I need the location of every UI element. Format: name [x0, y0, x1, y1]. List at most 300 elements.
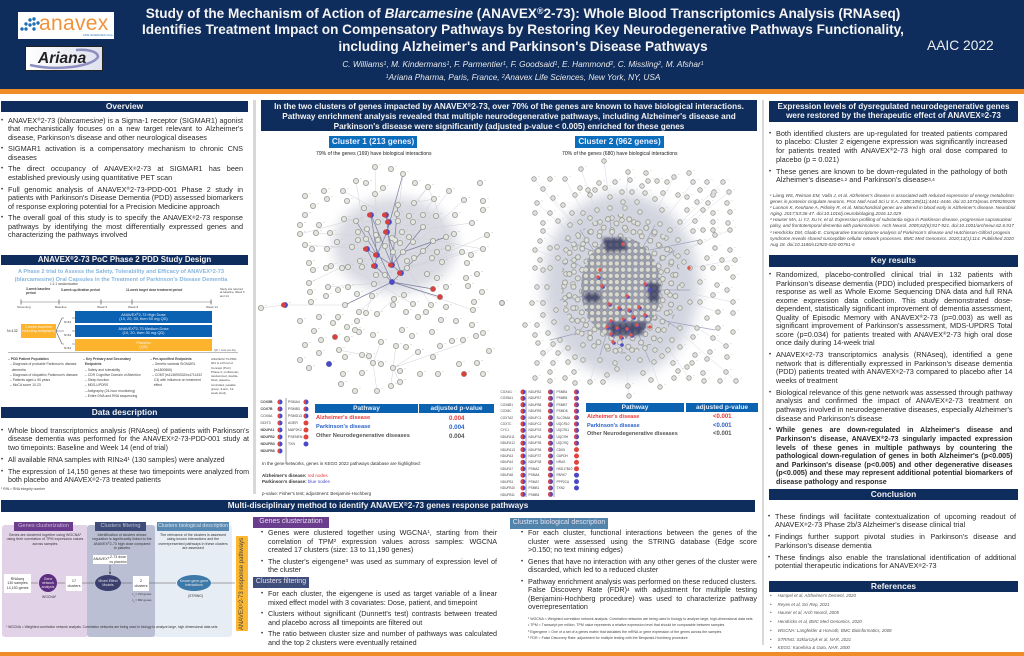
gene names: cluster 2 third column: PPP2CA: [556, 480, 569, 484]
arm: placebo: Placebo: [136, 340, 151, 344]
timeline labels: Screening: [17, 305, 31, 309]
gene names: cluster 1 second column: AGER: [288, 420, 298, 424]
stage text: filtering: Identification of clusters whose regulation is significantly linked to the ANAVEX®2-73 high dose compared to placebo: [92, 533, 152, 550]
endpoint lists: Phase 2, multicenter,: [211, 370, 239, 374]
gene names: cluster 2 third column: UQCR11: [556, 428, 569, 432]
endpoint lists: controlled, parallel-: [211, 383, 236, 387]
node: mixed effect models: [95, 575, 121, 591]
overview text: The direct occupancy of ANAVEX®2-73 at SIGMAR1 has been established previously using quantitative PET scan: [8, 164, 243, 182]
heading: overview: Overview: [106, 101, 143, 111]
gene names: cluster 2 third column: GAPDH: [556, 454, 568, 458]
row: Alzheimer's: Alzheimer's disease: [587, 414, 639, 420]
arm: high dose: [75, 311, 212, 323]
box: 2 clusters: 2: [140, 579, 142, 583]
timeline labels: at baseline, Week 5: [220, 290, 245, 294]
endpoint lists: – Key Primary and Secondary: [83, 357, 131, 361]
box: 17 clusters: 17: [72, 579, 76, 583]
method: filtering text: Clusters without significant (Dunnett's test) contrasts between treated and placebo across all timepoints are filtered out: [268, 609, 497, 627]
node: gene network analysis: Gene network analysis: [42, 577, 54, 589]
expression text: Both identified clusters are up-regulated for treated patients compared to placebo: Cluster 2 eigengene expression was significantly increased for patients treated with ANAVEX®2-73 high oral dose compared to placebo (p = 0.021): [776, 128, 1008, 164]
row: Alzheimer's: Alzheimer's disease: [316, 415, 370, 421]
gene names: cluster 2 third column: PARK7: [556, 473, 567, 477]
gene list: cluster 1: [278, 398, 308, 464]
arm: medium dose: ANAVEX®2-73 Medium Dose: [118, 326, 169, 330]
table header: p-value: adjusted p-value: [430, 405, 483, 412]
expression citations: palsy, and frontotemporal dementia with parkinsonism. Arch Neurol. 2005;62(6):917-921. doi:10.1001/archneur.62.6.917: [770, 223, 1014, 228]
value: Alzheimer's: <0.001: [713, 414, 732, 420]
node: known interactions: interactions: [185, 583, 203, 587]
gene names: cluster 1 second column: PSMB3: [288, 406, 300, 410]
gene names: cluster 2 first column: NDUFA4: [500, 460, 513, 464]
divider: [8, 352, 238, 353]
sample size: N=132: [7, 329, 18, 333]
gene names: cluster 2 first column: COX7C: [500, 422, 511, 426]
stage tag: filtering: Clusters filtering: [100, 523, 141, 529]
gene names: cluster 1 first column: DDIT3: [260, 420, 271, 424]
arm sizes: [64, 320, 71, 350]
right heading: expression levels: Expression levels of dysregulated neurodegenerative genes: [777, 102, 1010, 111]
endpoint lists: group, 3-arm, 14-: [211, 387, 234, 391]
network legend: In the gene networks, genes in KEGG 2022 pathways database are highlighted:: [262, 461, 421, 466]
value: other: 0.004: [449, 432, 464, 440]
title: [142, 6, 904, 54]
table: cluster 1 pathways: [315, 404, 494, 440]
gene names: cluster 2 third column: [556, 390, 572, 490]
right heading: expression levels: [768, 100, 1019, 122]
value: Parkinson's: <0.001: [713, 422, 732, 428]
expression citations: [770, 193, 1016, 247]
value: Parkinson's: 0.004: [449, 424, 464, 431]
endpoint lists: randomized, double-: [211, 374, 238, 378]
flow arrows: [31, 565, 235, 584]
multi-disciplinary heading: [0, 499, 756, 513]
stage tag: biological: Clusters biological description: [158, 523, 228, 529]
references list: • Reyes et al, Sci Rep, 2021: [770, 602, 830, 607]
gene names: cluster 2 second column: NDUFB8: [528, 403, 541, 407]
gene names: cluster 2 first column: COX8C: [500, 409, 511, 413]
gene names: cluster 1 second column: PSMD13: [288, 414, 302, 418]
timeline labels: Week 14: [206, 305, 218, 309]
timeline labels: Study site referred: [220, 287, 243, 291]
gene names: cluster 2 third column: SLC25A6: [556, 416, 570, 420]
table header: p-value: [686, 403, 758, 412]
gene names: cluster 1 first column: COX5B: [260, 400, 273, 404]
references list: [770, 592, 1010, 653]
baseline box: [21, 324, 56, 338]
gene names: cluster 2 first column: COX7A2: [500, 416, 513, 420]
heading: data description: Data description: [92, 407, 157, 417]
arm sizes: N=44: [64, 320, 71, 324]
gene names: cluster 2 second column: NDUFC1: [528, 416, 541, 420]
method: clusterization text: The cluster's eigengene3 was used as summary of expression level of the cluster: [268, 557, 497, 574]
row: Parkinson's: Parkinson's disease: [587, 422, 640, 428]
method: biological text: [521, 528, 757, 611]
value: Alzheimer's: 0.004: [449, 415, 464, 422]
box: RNAseq input: [4, 574, 31, 593]
panel: biological stage: [153, 525, 232, 637]
endpoint lists: – Sleep function: [85, 378, 109, 382]
gene names: cluster 2 first column: NDUFA7: [500, 467, 513, 471]
heading: key results: [768, 254, 1019, 268]
expression text: These genes are known to be down-regulated in the pathology of both Alzheimer's disease1,2 and Parkinson's disease3,4: [776, 166, 1008, 184]
node: mixed effect models: Mixed Effect: [98, 579, 118, 583]
timeline labels: period: [26, 291, 36, 295]
gene names: cluster 1 first column: NDUFB3: [260, 442, 275, 446]
gene names: cluster 2 third column: PSMD8: [556, 409, 567, 413]
conclusion text: [768, 512, 1016, 570]
stage tag: clusterization: Genes clusterization: [18, 523, 69, 529]
gene names: cluster 2 second column: PSMB4: [528, 492, 539, 496]
heading: conclusion: Conclusion: [871, 489, 916, 499]
network: cluster 2: [500, 158, 742, 399]
gene names: cluster 2 first column: NDUFA3: [500, 454, 513, 458]
label: cluster sizes: c 2 = 962 genes: [132, 598, 151, 604]
label: cluster sizes: [132, 592, 152, 604]
timeline labels: Week 5: [97, 305, 107, 309]
references list: • Hauser et al, Arch Neurol, 2005: [770, 610, 839, 615]
gene names: cluster 2 first column: COX6B1: [500, 403, 513, 407]
panel: study design: [1, 255, 248, 398]
box: dose vs placebo: [93, 555, 127, 564]
panel: overview: [1, 101, 248, 239]
references list: • Hampel et al, Alzheimer's Dement, 2020: [770, 593, 856, 598]
title: Study of the Mechanism of Action of Blarcamesine (ANAVEX®2-73): Whole Blood Transcriptomics Analysis (RNAseq): [146, 6, 900, 20]
gene names: cluster 1 first column: COX7B: [260, 406, 273, 410]
box: 17 clusters: clusters: [67, 584, 81, 588]
endpoint lists: – COMT(rs113895332/rs4711432: [152, 373, 202, 377]
gene names: cluster 1 first column: COX6A: [260, 414, 272, 418]
expression citations: 4 Hendrickx DM, Glaab E. Comparative transcriptome analysis of Parkinson's disease and Hutchinson-Gilford progeria: [770, 230, 1010, 235]
trial subtitle: [14, 269, 228, 283]
endpoint lists: Concept (PoC): [211, 366, 231, 370]
heading: overview: [0, 100, 249, 113]
row: other: Other Neurodegenerative diseases: [316, 432, 410, 438]
data text: Whole blood transcriptomics analysis (RNAseq) of patients with Parkinson's disease dementia was performed for the ANAVEX®2-73-PDD-001 study at two timepoints: Baseline and Week 14 (end of trial): [8, 426, 249, 452]
stage tag: clusterization: [14, 522, 73, 531]
table: cluster 2 pathways: [586, 403, 758, 437]
trial subtitle: A Phase 2 trial to Assess the Safety, Tolerability and Efficacy of ANAVEX®2-73: [18, 269, 224, 275]
endpoint lists: C3) with influence on treatment: [154, 378, 201, 382]
stage tag: biological: [157, 522, 229, 531]
endpoint lists: – Diagnosis of idiopathic Parkinson's disease: [10, 373, 78, 377]
endpoint lists: – Actigraphy (24-hour monitoring): [85, 389, 135, 393]
endpoint lists: – Diagnosis of probable Parkinson's disease: [10, 362, 76, 366]
references list: • WGCNA: Langfelder & Horvath, BMC Bioinformatics, 2008: [770, 628, 892, 633]
timeline labels: Week 8: [128, 305, 138, 309]
method: biological text: For each cluster, functional interactions between the genes of the cluster were assessed using the STRING database (Edge score >0.150; no text mining edges): [528, 528, 757, 554]
gene names: cluster 2 second column: NDUFS7: [528, 454, 541, 458]
gene names: cluster 2 second column: PSMA2: [528, 467, 539, 471]
stage text: biological: The relevance of the clusters is assessed using known interactions and the overrepresented pathways in these clusters are assessed: [158, 533, 228, 550]
header band: [0, 0, 1024, 94]
endpoint lists: – MoCA score 10-23: [10, 383, 41, 387]
conclusion text: These findings will facilitate contextualization of upcoming readout of ANAVEX®2-73 Phase 2b/3 Alzheimer's disease clinical trial: [775, 512, 1016, 529]
box: dose vs placebo: ANAVEX 2-73 dose: [93, 555, 126, 561]
method: filtering heading: Clusters filtering: [256, 578, 306, 585]
box: 2 clusters: [133, 576, 149, 591]
method: biological heading: [510, 518, 608, 529]
gene names: cluster 2 second column: [528, 390, 542, 496]
bottom band: [0, 652, 1024, 656]
center heading: Parkinson's disease were significantly (adjusted p-value < 0.005) enriched for these genes: [334, 122, 684, 131]
method: clusterization text: [261, 528, 497, 574]
gene names: cluster 2 second column: NDUFC2: [528, 422, 541, 426]
method: clusterization text: Genes were clustered together using WGCNA1, starting from their correlation of TPM2 expression values across samples: WGCNA created 17 clusters (size: 13 to 11,190 genes): [268, 528, 497, 554]
endpoint lists: blind, placebo-: [211, 378, 231, 382]
arm sizes: N=44: [64, 333, 71, 337]
heading: data description: [0, 406, 249, 419]
trial subtitle: (blarcamesine) Oral Capsules in the Treatment of Parkinson's Disease Dementia: [15, 277, 227, 283]
endpoint lists: dementia: [12, 368, 26, 372]
gene names: cluster 2 second column: PSMA7: [528, 480, 539, 484]
gene names: cluster 2 third column: TXN2: [556, 486, 565, 490]
label: cluster sizes: c 1 = 213 genes: [132, 592, 151, 598]
row: other: Other Neurodegenerative diseases: [587, 431, 678, 437]
gene names: cluster 2 third column: UQCRQ: [556, 441, 568, 445]
references list: • KEGG: Kanehisa & Goto, NAR, 2000: [770, 645, 850, 650]
multi-disciplinary heading: Multi-disciplinary method to identify ANAVEX®2-73 genes response pathways: [228, 501, 528, 510]
logo: Ariana: [25, 46, 103, 71]
footnote: 1 RIN = RNA integrity number: [1, 487, 45, 491]
panel: data description: [1, 407, 249, 491]
box: RNAseq input: 14,150 genes: [7, 586, 28, 590]
right heading: expression levels: were restored by the therapeutic effect of ANAVEX®2-73: [786, 111, 1001, 120]
endpoint lists: – PDD Patient Population: [8, 357, 49, 361]
gene names: cluster 2 first column: NDUFB11: [500, 492, 515, 496]
title: including Alzheimer's and Parkinson's Disease Pathways: [338, 39, 708, 54]
cluster 1 heading: Cluster 1 (213 genes): [332, 137, 414, 146]
cluster 1 subtitle: 79% of the genes (169) have biological interactions: [316, 151, 432, 157]
gene names: cluster 2 third column: HRAS: [556, 460, 565, 464]
method: footnotes: [528, 617, 752, 640]
expression citations: Aging. 2017;53:36-47. doi:10.1016/j.neurobiolaging.2016.12.029: [770, 211, 901, 216]
gene names: cluster 2 second column: PSMB1: [528, 486, 539, 490]
gene names: cluster 2 second column: PSMA4: [528, 473, 539, 477]
endpoint lists: – Entire DNA and RNA sequencing: [85, 394, 137, 398]
heading: key results: Key results: [871, 255, 916, 265]
method: biological heading: Clusters biological description: [513, 519, 605, 526]
timeline labels: Baseline: [55, 305, 67, 309]
gene names: cluster 1 first column: NDUFB6: [260, 448, 275, 452]
gene names: cluster 2 first column: NDUFB1: [500, 480, 513, 484]
endpoint lists: [8, 357, 239, 398]
node: known interactions: [177, 575, 211, 591]
method: clusterization heading: [253, 517, 329, 528]
gene names: cluster 2 second column: NDUFS3: [528, 428, 541, 432]
gene names: cluster 2 first column: NDUFA12: [500, 441, 515, 445]
panel: filtering stage: [87, 525, 155, 637]
gene names: cluster 1 second column: MAP2K2: [288, 428, 302, 432]
gene names: cluster 2 third column: PSMB5: [556, 396, 567, 400]
table header: pathway: Pathway: [353, 405, 380, 412]
gene names: cluster 2 second column: NDUFB2: [528, 390, 541, 394]
method: filtering text: The ratio between cluster size and number of pathways was calculated and the top 2 clusters were eventually retained: [268, 629, 497, 647]
authors: 1Ariana Pharma, Paris, France, 2Anavex Life Sciences, New York, NY, USA: [386, 73, 660, 82]
gene names: cluster 2 second column: NDUFB9: [528, 409, 541, 413]
endpoint lists: effect: [154, 383, 162, 387]
gene names: cluster 2 second column: NDUFB7: [528, 396, 541, 400]
gene names: cluster 1 first column: NDUFA1: [260, 428, 275, 432]
heading: references: [768, 580, 1019, 592]
stage text: clusterization: Genes are clustered together using WGCNA1 using their correlation of TPM expression values across samples: [7, 533, 83, 546]
gene names: cluster 1 second column: [288, 400, 302, 446]
key results text: ANAVEX®2-73 transcriptomics analysis (RNAseq), identified a gene network that is differentially expressed in Parkinson's disease dementia (PDD) patients treated with ANAVEX®2-73 compared to placebo after 14 weeks of treatment: [776, 350, 1012, 385]
endpoint lists: 001 is a Proof of: [211, 361, 233, 365]
table header: pathway: Pathway: [622, 404, 648, 411]
endpoint lists: – MDS-UPDRS: [85, 383, 108, 387]
expression citations: 1 Liang WS, Reiman EM, Valla J, et al. Alzheimer's disease is associated with reduced expression of energy metabolism: [770, 193, 1014, 198]
timeline labels: [17, 282, 245, 309]
method: filtering text: [261, 589, 497, 647]
box: dose vs placebo: ®: [108, 558, 109, 560]
data text: [1, 426, 249, 484]
network legend: p-value: Fisher's test; adjustment: Benjamini-Hochberg: [262, 490, 371, 496]
center column rule: [253, 100, 256, 494]
timeline labels: 11-week target dose treatment period: [126, 288, 182, 292]
gene names: cluster 2 first column: CYC1: [500, 428, 509, 432]
network: cluster 1: [258, 164, 505, 394]
gene names: cluster 2 first column: [500, 390, 515, 496]
gene names: cluster 1 second column: PSENEN: [288, 434, 302, 438]
references list: • Hendricks et al, BMC Med Genomics, 2020: [770, 619, 862, 624]
gene names: cluster 2 third column: PSMB7: [556, 403, 567, 407]
gene list: cluster 2: [520, 390, 579, 497]
timeline labels: 1:1:1 randomization: [50, 282, 78, 286]
gene names: cluster 2 first column: NDUFA13: [500, 448, 515, 452]
arm: placebo: (QD): [139, 344, 148, 349]
logo: Anavex: anavex: [39, 12, 109, 35]
gene names: cluster 2 second column: NDUFS6: [528, 448, 541, 452]
table header: p-value: adjusted p-value: [696, 404, 748, 411]
gene names: cluster 2 third column: UQCRH: [556, 435, 568, 439]
baseline box: 2-week baseline including actigraphy: [22, 324, 55, 333]
node: known interactions: Known gene-gene: [180, 579, 208, 583]
method: filtering heading: [253, 577, 309, 588]
expression citations: Aug 18. doi:10.1186/s12920-020-00761-6: [770, 242, 855, 247]
flowchart: [2, 522, 248, 637]
logo: Anavex: [18, 12, 114, 39]
method: clusterization heading: Genes clusterization: [259, 518, 323, 525]
gene names: cluster 2 second column: NDUFS5: [528, 441, 541, 445]
note: QD = once per day: [214, 349, 236, 352]
table header: p-value: [419, 404, 494, 413]
panel: study design: N=44: [64, 346, 71, 350]
stage tag: filtering: [95, 522, 146, 531]
references list: • STRING: Szklarczyk et al, NAR, 2021: [770, 637, 851, 642]
box: dose vs placebo: vs placebo: [109, 560, 127, 564]
endpoint lists: (rs1800866): [154, 368, 172, 372]
conclusion text: Findings further support pivotal studies in Parkinson's disease and Parkinson's disease dementia: [775, 532, 1016, 550]
expression citations: 2 Lunnon K, Keohane A, Pidsley R, et al. Mitochondrial genes are altered in blood early in Alzheimer's disease. Neurobiol: [770, 205, 1015, 210]
endpoint lists: ANAVEX2-73-PDD-: [211, 357, 237, 361]
arm: medium dose: [75, 325, 212, 337]
heading: study design: [0, 254, 249, 266]
arm: high dose: (10, 20, 30, then 50 mg QD): [119, 316, 168, 321]
node: mixed effect models: Models: [102, 583, 114, 587]
authors: C. Williams1, M. Kindermans1, F. Parmentier1, F. Goodsaid1, E. Hammond2, C. Missling2, M. Afshar1: [342, 60, 704, 69]
overview text: SIGMAR1 activation is a compensatory mechanism to chronic CNS diseases: [8, 144, 243, 162]
overview text: Full genomic analysis of ANAVEX®2-73-PDD-001 Phase 2 study in patients with Parkinson's Disease Dementia (PDD) assessed biomarkers of response exploring potential for a Precision Medicine approach: [8, 185, 243, 211]
gene names: cluster 1 first column: NDUFB2: [260, 434, 275, 438]
gene names: cluster 2 first column: NDUFA8: [500, 473, 513, 477]
footnote: 1 WGCNA = Weighted correlation network analysis. Correlation networks are being used in biology to analyze large, high dimensional data sets: [6, 625, 217, 629]
box: 17 clusters: [66, 576, 82, 591]
timeline labels: 5-week up-titration period: [61, 288, 100, 292]
conclusion text: These findings also enable the translational identification of additional potential therapeutic indications for ANAVEX®2-73: [775, 553, 1016, 570]
endpoint lists: – Pre-specified Endpoints: [150, 357, 192, 361]
value: other: <0.001: [713, 431, 732, 437]
timeline: [20, 300, 212, 344]
expression text: [769, 128, 1008, 184]
title: Identifies Treatment Impact on Compensatory Pathways by Restoring Key Neurodegenerative Pathways Functionality,: [142, 22, 904, 37]
gene names: cluster 1 first column: [260, 400, 275, 452]
output box: [236, 536, 248, 631]
row: Parkinson's: Parkinson's disease: [316, 424, 370, 430]
label: WGCNA: WGCNA1: [42, 595, 56, 599]
method: footnotes: 1 WGCNA = Weighted correlation network analysis. Correlation networks are being used in biology to analyze large, high-dimensional data sets: [528, 617, 752, 621]
box: 2 clusters: clusters: [134, 584, 148, 588]
data text: All available RNA samples with RIN≥41 (130 samples) were analyzed: [8, 456, 225, 464]
expression citations: 3 Hauser MA, Li YJ, Xu H, et al. Expression profiling of substantia nigra in Parkinson disease, progressive supranuclear: [770, 217, 1012, 222]
heading: study design: ANAVEX®2-73 PoC Phase 2 PDD Study Design: [38, 255, 211, 264]
endpoint lists: – Genetic variants SIGMAR1: [152, 362, 195, 366]
table header: pathway: [586, 403, 684, 412]
gene names: cluster 2 first column: NDUFB10: [500, 486, 515, 490]
timeline labels: 3-week baseline: [26, 287, 50, 291]
network legend: Parkinson's disease: blue nodes: [262, 479, 330, 484]
gene names: cluster 2 third column: PSMB4: [556, 390, 567, 394]
endpoint lists: week study: [211, 391, 226, 395]
box: RNAseq input: RNAseq: [11, 577, 24, 581]
cluster 2 subtitle: 70% of the genes (680) have biological interactions: [562, 151, 678, 157]
heading: conclusion: [768, 488, 1019, 501]
center heading: [260, 99, 758, 132]
data text: The expression of 14,150 genes at these two timepoints were analyzed from both placebo and ANAVEX®2-73 treated patients: [8, 468, 249, 484]
key results text: Biological relevance of this gene network was assessed through pathway analysis and confirmed the impact of ANAVEX®2-73 treatment on pathways involved in neurodegenerative diseases, especially Alzheimer's disease and Parkinson's disease: [776, 388, 1012, 423]
gene names: cluster 2 second column: NDUFS4: [528, 435, 541, 439]
key results text: [769, 270, 1013, 486]
gene names: cluster 2 first column: COX5A1: [500, 396, 513, 400]
label: STRING: (STRING): [188, 594, 203, 598]
gene names: cluster 2 third column: HSD17B10: [556, 467, 572, 471]
gene names: cluster 2 first column: NDUFA11: [500, 435, 515, 439]
method: footnotes: 3 Eigengene = One of a set of a genes matrix that tabulates the mRNA or gene expression of the genes across the samples: [528, 630, 721, 634]
timeline labels: and 14: [220, 294, 229, 298]
network legend: [262, 461, 421, 496]
box: RNAseq input: 130 samples: [7, 581, 28, 585]
node: gene network analysis: [39, 574, 57, 592]
center heading: Pathway enrichment analysis revealed that multiple neurodegenerative pathways, including Alzheimer's disease and: [282, 112, 736, 121]
key results text: Randomized, placebo-controlled clinical trial in 132 patients with Parkinson's disease dementia (PDD) included prespecified biomarkers of response as well as Whole Exome Sequencing DNA data and full RNA exome expression data collection. This study demonstrated dose-dependent, statistically significant improvement of dementia assessment, Quality of Episodic Memory with ANAVEX®2-73 (p=0.003) as well as significant improvement of Parkinson's assessment, MDS-UPDRS Total score (p=0.034) for patients treated with ANAVEX®2-73 high oral dose once daily during 14-week trial: [776, 270, 1012, 347]
method: footnotes: 2 TPM = Transcript per million. TPM value represents a relative expression level that should be comparable between samples: [528, 623, 724, 627]
gene names: cluster 1 second column: TXN: [288, 442, 295, 446]
key results text: While genes are down-regulated in Alzheimer's disease and Parkinson's disease, ANAVEX®2-73 singularly impacted expression levels of these genes in multiple pathways by countering the pathological down-regulation of genes in both Alzheimer's (p<0.005) and Parkinson's disease (p<0.005) and other degenerative diseases (p<0.005) and these may represent additional potential biomarkers of disease pathology and response: [776, 426, 1013, 486]
arm: placebo: [75, 339, 212, 351]
table header: pathway: [315, 404, 418, 413]
right column rule: [762, 100, 764, 645]
arm: medium dose: (10, 20, then 30 mg QD): [123, 330, 164, 335]
cluster 2 heading: Cluster 2 (962 genes): [578, 137, 661, 146]
method: filtering text: For each cluster, the eigengene is used as target variable of a linear mixed effect model with 3 covariates: Dose, patient, and timepoint: [268, 589, 497, 606]
endpoint lists: – CDR Cognitive Domain of Attention: [85, 373, 141, 377]
method: biological text: Genes that have no interaction with any other genes of the cluster were discarded, which led to a reduced cluster: [528, 557, 757, 574]
expression citations: syndrome reveals shared susceptible cellular network processes. BMC Med Genomics. 2020;13(1):114. Published 2020: [770, 236, 1014, 241]
network legend: Alzheimer's disease: red nodes: [262, 473, 328, 478]
logo: Ariana: Ariana: [38, 50, 86, 67]
arm: high dose: ANAVEX®2-73 High Dose: [121, 312, 166, 316]
endpoint lists: – Safety and tolerability: [85, 368, 120, 372]
gene names: cluster 1 second column: PSMA4: [288, 400, 300, 404]
